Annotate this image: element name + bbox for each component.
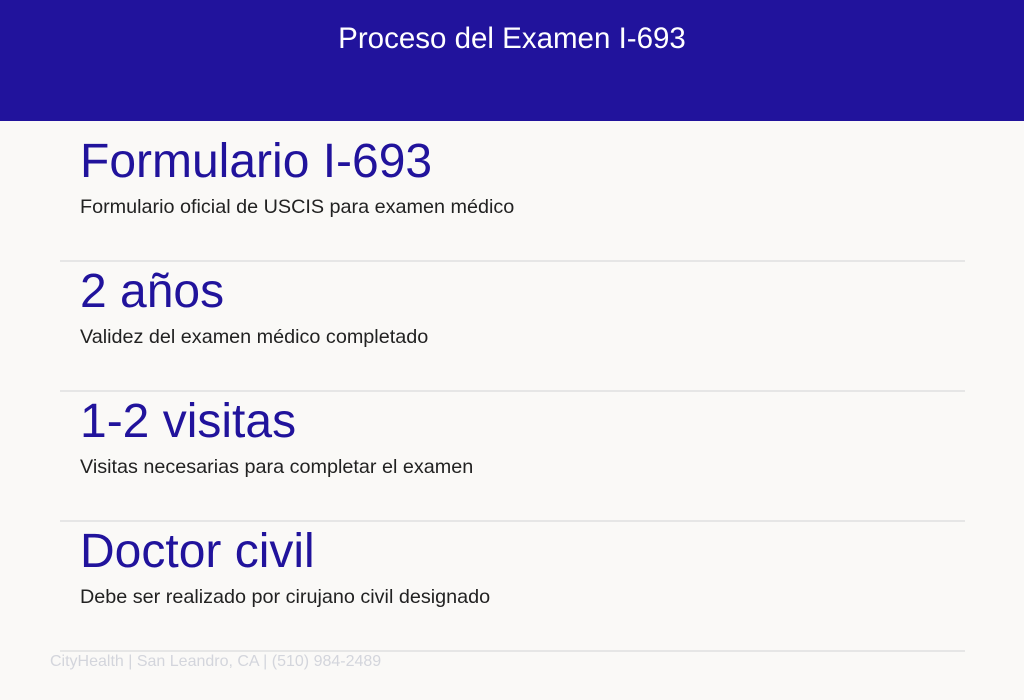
stat: 2 años: Validez del examen médico completado bbox=[80, 326, 428, 348]
title: Proceso del Examen I-693 bbox=[338, 22, 686, 55]
stat: doctor bbox=[60, 520, 965, 652]
stat: doctor: Debe ser realizado por cirujano civil designado bbox=[80, 586, 490, 608]
stat: visitas bbox=[60, 390, 965, 522]
stat: 2 años: 2 años bbox=[80, 265, 224, 318]
stat: Formulario bbox=[60, 130, 965, 262]
footer: CityHealth | San Leandro, CA | (510) 984-2489 bbox=[50, 653, 381, 670]
stat: Formulario: Formulario I-693 bbox=[80, 135, 432, 188]
stat: Formulario: Formulario oficial de USCIS para examen médico bbox=[80, 196, 514, 218]
stat: 2 años bbox=[60, 260, 965, 392]
stat: visitas: 1-2 visitas bbox=[80, 395, 296, 448]
header bbox=[0, 0, 1024, 121]
stat: doctor: Doctor civil bbox=[80, 525, 315, 578]
stat: visitas: Visitas necesarias para completar el examen bbox=[80, 456, 473, 478]
